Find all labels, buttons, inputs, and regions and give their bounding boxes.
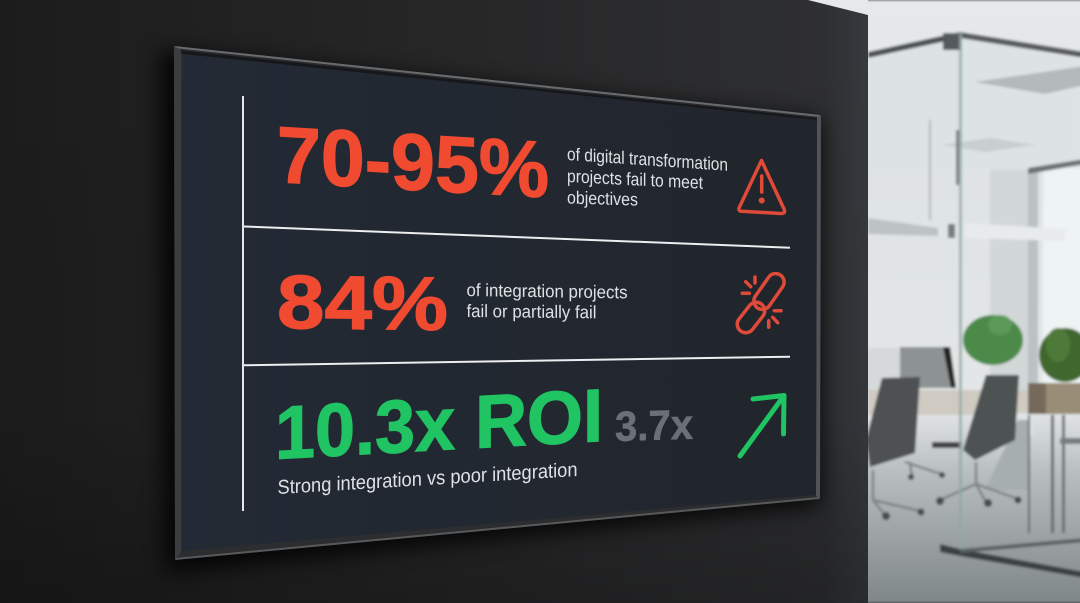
stat three: ROI comparison (275, 373, 784, 499)
icon: upward arrow (740, 396, 784, 456)
stat description: Strong integration vs poor integration (278, 459, 578, 499)
comparison value 3.7x: 3.7x (615, 401, 694, 450)
stat value 10.3x ROI: 10.3x ROI (275, 373, 603, 475)
screen panel (182, 54, 817, 551)
divider one (244, 226, 790, 248)
monitor frame (174, 46, 821, 560)
stat description (466, 280, 628, 322)
background office seen through glass (858, 0, 1080, 603)
stat description: of digital transformation (567, 144, 728, 175)
icon: broken chain link (734, 270, 787, 336)
stat value 84%: 84% (277, 260, 448, 347)
ceiling corner above wall (800, 0, 868, 15)
stat one: failed digital transformations (277, 110, 785, 214)
stat description: projects fail to meet (567, 166, 703, 193)
stat value 70-95%: 70-95% (277, 110, 549, 214)
vertical rule (242, 96, 244, 511)
stat description (567, 144, 728, 210)
stat description: objectives (567, 188, 638, 210)
icon: warning triangle (739, 160, 785, 214)
stat description: of integration projects (466, 280, 628, 302)
display shadow on wall (160, 50, 820, 572)
stat two: failed integrations (277, 260, 787, 347)
divider two (244, 357, 790, 365)
stat description: fail or partially fail (466, 301, 596, 322)
